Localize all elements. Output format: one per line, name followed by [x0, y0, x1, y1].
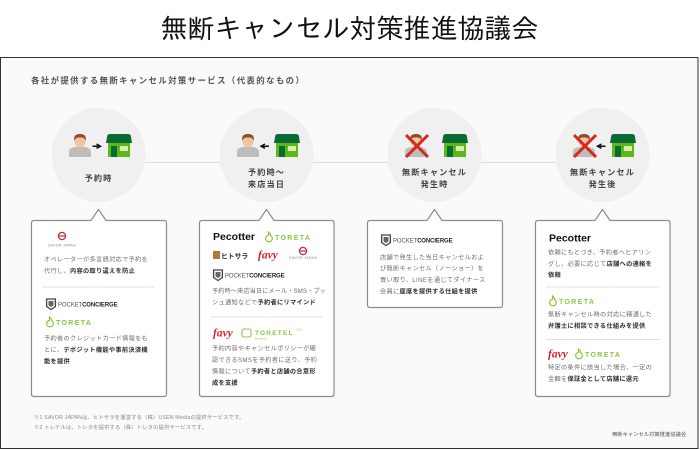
- stage 4: after no-show: 発生後: [589, 179, 616, 189]
- card 3 text block: び無断キャンセル（ノーショー）を: [380, 264, 484, 272]
- card 2 text block B: 予約者と店舗の合意形: [251, 368, 316, 376]
- logo: Toreta: TORETA: [585, 352, 621, 359]
- logo: favy: favy: [258, 250, 279, 262]
- heading: 各社が提供する無断キャンセル対策サービス（代表的なもの）: [31, 76, 305, 86]
- logo: Toreta: [576, 349, 621, 359]
- card 4 text block A: 依頼にもとづき、予約者へヒアリン: [548, 250, 651, 256]
- card 2 text block A: シュ通知などで: [212, 298, 257, 306]
- stage 2: reservation to visit day: [220, 108, 314, 202]
- credit: 無断キャンセル対策推進協議会: [612, 430, 687, 438]
- card 4 text block C: 特定の条件に該当した場合、一定の: [548, 364, 652, 372]
- card 2 text block B: 成を支援: [212, 379, 239, 387]
- footnotes: ※1 SAVOR JAPANは、ヒトサラを運営する（株）USEN Mediaの提供サービスです。: [34, 413, 244, 421]
- logo: Toretel: by toreta: [255, 336, 267, 340]
- card 2 text block A: 予約時〜来店当日にメール・SMS・プッ: [212, 287, 326, 295]
- logo: Toretel: ※2: [296, 328, 302, 332]
- title: 無断キャンセル対策推進協議会: [160, 15, 538, 42]
- stage 3: no-show occurrence: 無断キャンセル: [402, 167, 467, 177]
- stage 2: reservation to visit day: 来店当日: [248, 179, 285, 189]
- card 4 text block A: グし、必要に応じて: [548, 260, 607, 268]
- logo: Pecotter: Pecotter: [213, 231, 255, 243]
- logo: Savor Japan: SAVOR JAPAN: [289, 256, 317, 260]
- logo: Pocket Concierge: POCKETCONCIERGE: [58, 302, 118, 308]
- logo: Toreta: TORETA: [275, 235, 311, 242]
- logo: Savor Japan: [289, 247, 317, 260]
- card 4 text block A: 依頼: [548, 271, 562, 279]
- stage 2: reservation to visit day: 予約時〜: [248, 167, 285, 177]
- card 3 text block: 会員に: [380, 288, 400, 296]
- card 1 text block A: 内容の取り違えを防止: [70, 267, 135, 275]
- panel: card 2: [200, 210, 334, 396]
- footnotes: [34, 413, 244, 431]
- card 3 text block: 座席を提供する仕組を提供: [400, 288, 478, 296]
- logo: Toreta: [266, 232, 311, 242]
- logo: Hitosara: ヒトサラ: [221, 252, 248, 260]
- card 1 text block B: 予約者のクレジットカード情報をも: [44, 336, 148, 342]
- card 4 text block B: 無断キャンセル時の対応に精通した: [548, 312, 652, 318]
- stage 4: after no-show: [556, 108, 650, 202]
- card 1 text block B: デポジット機能や事前決済機: [63, 346, 148, 354]
- panel: card 4: [536, 210, 670, 396]
- stage 3: no-show occurrence: [388, 108, 482, 202]
- logo: favy: favy: [548, 348, 569, 360]
- card 2 text block B: 認できるSMSを予約者に送り、予約: [212, 356, 317, 364]
- card 4 text block C: 金額を: [548, 375, 568, 383]
- logo: Savor Japan: [48, 232, 76, 248]
- card 4 text block C: 保証金として店舗に還元: [568, 375, 639, 383]
- card 1 text block A: 代行し、: [44, 267, 70, 275]
- logo: favy: favy: [213, 328, 234, 340]
- stage 4: after no-show: 無断キャンセル: [570, 167, 635, 177]
- stage 3: no-show occurrence: 発生時: [421, 179, 448, 189]
- logo: Savor Japan: SAVOR JAPAN: [48, 244, 76, 248]
- card 2 text block A: 予約者にリマインド: [257, 298, 316, 306]
- logo: Toreta: [550, 296, 595, 306]
- card 4 text block B: 弁護士に相談できる仕組みを提供: [548, 322, 646, 330]
- panel: card 3: [368, 210, 502, 308]
- panel: card 1: [32, 210, 166, 396]
- stage 1: reservation: [52, 108, 146, 202]
- logo: Hitosara: [213, 251, 248, 260]
- stage 1: reservation: 予約時: [85, 173, 112, 183]
- timeline connector: [145, 162, 556, 164]
- logo: Toretel: TORETEL: [255, 330, 294, 337]
- logo: Toreta: TORETA: [56, 320, 92, 327]
- logo: Pocket Concierge: POCKETCONCIERGE: [393, 238, 453, 244]
- logo: Pocket Concierge: POCKETCONCIERGE: [225, 274, 285, 280]
- logo: Toreta: [47, 317, 92, 327]
- logo: Pecotter: Pecotter: [549, 232, 591, 244]
- card 1 text block A: オペレーターが多言語対応で予約を: [44, 256, 148, 264]
- logo: Toreta: TORETA: [559, 299, 595, 306]
- card 4 text block A: 店舗への連絡を: [607, 260, 652, 268]
- card 2 text block B: 予約内容やキャンセルポリシーが確: [212, 346, 316, 352]
- card 3 text block: 店舗で発生した当日キャンセルおよ: [380, 254, 484, 262]
- logo: Toretel: [242, 328, 302, 340]
- footnotes: ※2 トレテルは、トレタを提供する（株）トレタの提供サービスです。: [34, 423, 207, 431]
- logo: Pocket Concierge: [47, 299, 118, 310]
- card 1 text block B: とに、: [44, 347, 63, 354]
- card 3 text block: 買い取り、LINEを通じてダイナース: [380, 276, 485, 284]
- logo: Pocket Concierge: [214, 270, 285, 280]
- card 2 text block B: 情報について: [212, 368, 251, 376]
- card 1 text block B: 能を提供: [44, 358, 70, 366]
